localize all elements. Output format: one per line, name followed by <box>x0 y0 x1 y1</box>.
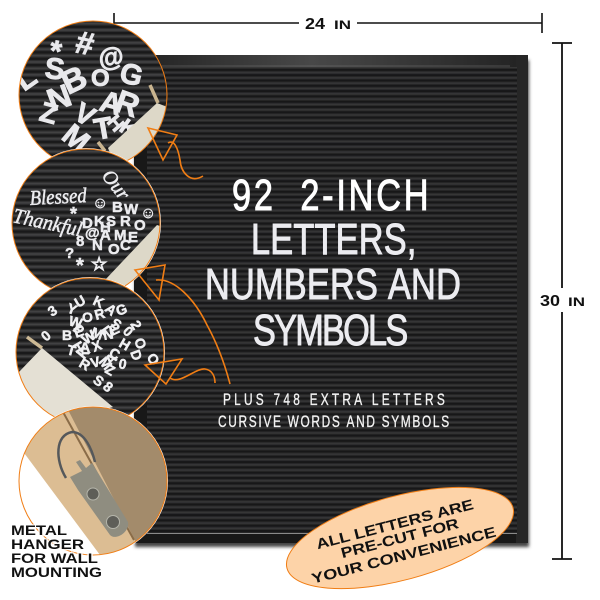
circle: cursive words: S <box>106 213 116 230</box>
circle: scattered letters and symbols: S <box>43 52 66 87</box>
circle: small extra letters spilling from bag <box>16 277 165 417</box>
circle: cursive words: Our <box>97 166 134 205</box>
circle: scattered letters and symbols: M <box>56 118 96 159</box>
circle: small extra letters spilling from bag: S <box>108 315 125 333</box>
circle: cursive words: ☺ <box>140 205 156 222</box>
circle: scattered letters and symbols <box>18 20 168 161</box>
circle: cursive words: ? <box>65 245 74 262</box>
subheading: plus 748 extra letters: PLUS 748 EXTRA LETTERS <box>223 391 445 410</box>
circle: small extra letters spilling from bag: T <box>65 341 78 359</box>
callout: all letters are pre-cut <box>276 467 524 600</box>
circle: scattered letters and symbols: @ <box>96 40 126 74</box>
circle: small extra letters spilling from bag: N <box>102 325 114 343</box>
circle: cursive words: E <box>128 229 138 246</box>
circle: small extra letters spilling from bag: A <box>102 350 120 368</box>
circle: small extra letters spilling from bag: X <box>90 336 104 355</box>
circle: scattered letters and symbols: Z <box>36 96 61 130</box>
circle: scattered letters and symbols: G <box>116 57 146 94</box>
circle: scattered letters and symbols: R <box>111 83 145 124</box>
circle: cursive words: ☆ <box>91 254 108 274</box>
headline: 92 2-inch letters, numbers and symbols: 92 2-INCH <box>232 171 429 220</box>
subheading: plus 748 extra letters <box>218 391 449 432</box>
circle: small extra letters spilling from bag: A <box>102 300 120 319</box>
circle: small extra letters spilling from bag: C <box>107 344 123 363</box>
circle: small extra letters spilling from bag: R <box>93 305 107 323</box>
circle: small extra letters spilling from bag: 2 <box>127 318 145 332</box>
circle: small extra letters spilling from bag: O <box>82 309 93 325</box>
arrow: third circle <box>145 359 215 384</box>
circle: cursive words: ☺ <box>92 195 108 212</box>
height dimension: 30 in: IN <box>568 295 585 309</box>
circle: small extra letters spilling from bag: B <box>62 327 72 343</box>
circle: small extra letters spilling from bag: U <box>72 292 88 311</box>
callout: all letters are pre-cut: PRE-CUT FOR <box>339 516 461 562</box>
circle: cursive words: B <box>112 199 123 216</box>
circle: scattered letters and symbols: V <box>69 96 101 133</box>
hanger <box>58 432 128 537</box>
circle: cursive words: * <box>76 255 84 277</box>
label: metal hanger for wall mounting <box>11 523 102 580</box>
width dimension: 24 in: IN <box>334 18 351 32</box>
label: metal hanger for wall mounting: FOR WALL <box>11 551 98 566</box>
circle: small extra letters spilling from bag: H <box>116 335 133 354</box>
circle: small extra letters spilling from bag: 3 <box>45 302 60 319</box>
circle: small extra letters spilling from bag: H <box>69 338 88 355</box>
circle: cursive words: A <box>100 227 111 244</box>
circle: small extra letters spilling from bag: M <box>96 354 115 373</box>
fabric bag <box>19 348 113 416</box>
circle: scattered letters and symbols: L <box>9 60 43 98</box>
width dimension: 24 in: 24 <box>305 16 325 33</box>
circle: small extra letters spilling from bag: O <box>144 350 163 368</box>
circle: cursive words: R <box>120 213 131 230</box>
circle: cursive words: @ <box>85 225 100 242</box>
circle: small extra letters spilling from bag: K <box>74 344 93 362</box>
arrow: first circle <box>148 128 203 179</box>
label: metal hanger for wall mounting: HANGER <box>11 537 84 552</box>
circle: scattered letters and symbols: * <box>47 34 64 69</box>
circle: cursive words <box>12 148 161 288</box>
callout: all letters are pre-cut: ALL LETTERS ARE <box>315 497 476 553</box>
circle: small extra letters spilling from bag: E <box>72 323 86 341</box>
circle: cursive words: Thankful <box>11 203 85 241</box>
height dimension: 30 in: 30 <box>540 293 560 310</box>
circle: small extra letters spilling from bag: G <box>114 300 129 319</box>
circle: small extra letters spilling from bag: 0 <box>120 323 137 340</box>
circle: cursive words: N <box>92 237 103 254</box>
circle: scattered letters and symbols: # <box>73 24 98 63</box>
circle: small extra letters spilling from bag: S <box>90 371 107 390</box>
circle: small extra letters spilling from bag: M <box>89 324 105 343</box>
headline: 92 2-inch letters, numbers and symbols: LETTERS, <box>251 215 416 264</box>
fabric bag <box>106 225 160 286</box>
circle: cursive words: M <box>114 227 126 244</box>
circle: scattered letters and symbols: N <box>42 77 76 119</box>
circle: scattered letters and symbols: H <box>102 111 128 136</box>
circle: small extra letters spilling from bag: 0 <box>38 327 54 344</box>
headline: 92 2-inch letters, numbers and symbols <box>205 171 461 355</box>
circle: small extra letters spilling from bag: P <box>70 320 88 338</box>
circle: small extra letters spilling from bag: W <box>79 326 99 347</box>
circle: cursive words: K <box>94 213 105 230</box>
circle: scattered letters and symbols: K <box>115 114 143 143</box>
circle: cursive words: D <box>82 215 93 232</box>
circle: cursive words: Blessed <box>29 183 88 210</box>
circle: scattered letters and symbols: B <box>55 58 93 101</box>
circle: cursive words: H <box>100 219 111 236</box>
circle: small extra letters spilling from bag: L <box>98 323 116 339</box>
circle: small extra letters spilling from bag: Y <box>65 300 80 318</box>
circle: cursive words: 8 <box>76 233 84 250</box>
label: metal hanger for wall mounting: MOUNTING <box>11 565 102 580</box>
height dimension: 30 in <box>540 43 585 559</box>
circle: cursive words: * <box>70 204 77 224</box>
width dimension: 24 in <box>114 13 542 33</box>
circle: cursive words: W <box>124 201 139 218</box>
circle: scattered letters and symbols: O <box>91 65 110 92</box>
circle: cursive words: C <box>120 237 131 254</box>
circle: cursive words: O <box>134 217 146 234</box>
headline: 92 2-inch letters, numbers and symbols: SYMBOLS <box>253 306 408 355</box>
circle: small extra letters spilling from bag: V <box>89 353 102 371</box>
headline: 92 2-inch letters, numbers and symbols: NUMBERS AND <box>205 260 461 309</box>
letter board <box>134 55 529 547</box>
arrow: second circle <box>135 265 230 384</box>
circle: cursive words: O <box>108 241 120 258</box>
circle: small extra letters spilling from bag: Z <box>102 361 118 379</box>
callout: all letters are pre-cut: YOUR CONVENIENCE <box>310 524 498 588</box>
circle: small extra letters spilling from bag: W <box>67 312 85 332</box>
circle: small extra letters spilling from bag: E <box>107 320 122 339</box>
circle: small extra letters spilling from bag: R <box>76 355 93 374</box>
circle: small extra letters spilling from bag: A <box>80 339 90 355</box>
circle: small extra letters spilling from bag: D <box>127 348 146 363</box>
circle: small extra letters spilling from bag: K <box>91 292 107 311</box>
label: metal hanger for wall mounting: METAL <box>11 523 67 538</box>
circle: metal wall hanger <box>18 406 168 556</box>
subheading: plus 748 extra letters: CURSIVE WORDS AND SYMBOLS <box>218 413 449 432</box>
circle: small extra letters spilling from bag: 0 <box>117 355 128 372</box>
circle: small extra letters spilling from bag: 8 <box>100 378 116 395</box>
circle: small extra letters spilling from bag: O <box>131 336 150 351</box>
circle: scattered letters and symbols: T <box>91 111 115 147</box>
fabric bag <box>108 103 166 160</box>
circle: scattered letters and symbols: A <box>96 85 126 122</box>
